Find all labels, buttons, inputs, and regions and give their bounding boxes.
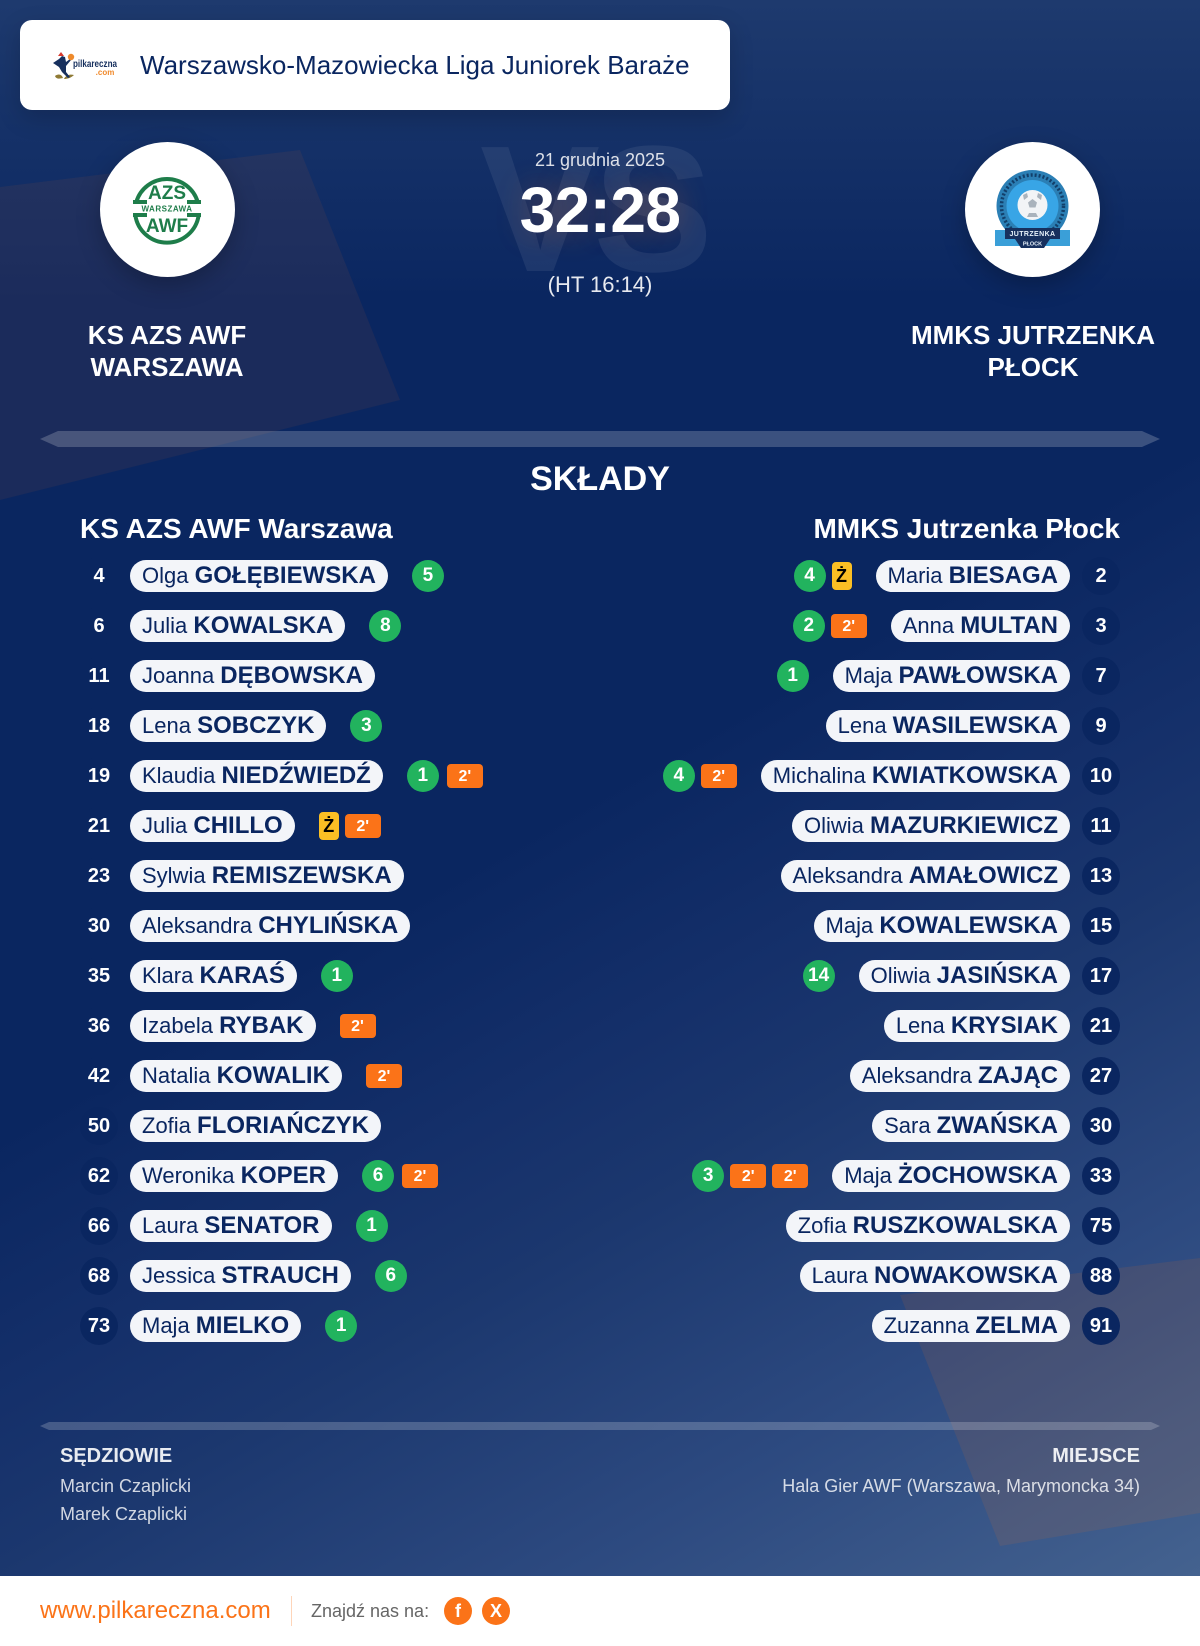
player: Rybak: 36	[88, 1015, 110, 1037]
player: Kowalik: Natalia KOWALIK	[142, 1062, 330, 1089]
player: Kowalska: 6	[93, 615, 105, 637]
player: Floriańczyk: 50	[88, 1115, 110, 1137]
player: Amałowicz	[781, 857, 1120, 895]
player: Karaś	[88, 960, 353, 992]
player: Multan	[793, 610, 1107, 642]
player: Wasilewska: Lena WASILEWSKA	[838, 712, 1058, 739]
player: Remiszewska: Sylwia REMISZEWSKA	[142, 862, 392, 889]
player: Mielko: 73	[88, 1315, 110, 1337]
player: Ruszkowalska: 75	[1090, 1215, 1112, 1237]
player: Nowakowska	[800, 1257, 1120, 1295]
referees heading: SĘDZIOWIE	[60, 1445, 172, 1467]
player: Sobczyk: 3	[361, 715, 372, 736]
player: Sobczyk	[88, 710, 382, 742]
player: Biesaga	[794, 560, 1107, 592]
player: Pawłowska: Maja PAWŁOWSKA	[845, 662, 1058, 689]
player: Kwiatkowska	[663, 757, 1120, 795]
player: Amałowicz: 13	[1090, 865, 1112, 887]
player: Kwiatkowska: 2'	[712, 768, 725, 785]
team name: left: WARSZAWA	[90, 352, 244, 382]
player: Gołębiewska: 4	[93, 565, 105, 587]
footer	[0, 1576, 1200, 1646]
player: Kowalska: Julia KOWALSKA	[142, 612, 333, 639]
player: Kowalska	[93, 610, 401, 642]
player: Krysiak	[884, 1007, 1120, 1045]
player: Strauch: Jessica STRAUCH	[142, 1262, 339, 1289]
player: Pawłowska: 7	[1095, 665, 1107, 687]
player: Biesaga: Ż	[836, 566, 847, 586]
right team roster	[663, 560, 1120, 1345]
player: Kowalik	[88, 1060, 402, 1092]
player: Żochowska: 3	[703, 1165, 714, 1186]
player: Biesaga: 2	[1095, 565, 1107, 587]
icon: pilkareczna logo: .com	[96, 68, 114, 77]
player: Amałowicz: Aleksandra AMAŁOWICZ	[793, 862, 1058, 889]
player: Dębowska: Joanna DĘBOWSKA	[142, 662, 363, 689]
VS watermark: VS	[480, 109, 706, 310]
team heading: left: KS AZS AWF Warszawa	[80, 513, 393, 544]
team heading: right: MMKS Jutrzenka Płock	[813, 513, 1120, 544]
icon: pilkareczna logo	[53, 52, 118, 79]
player: Jasińska: 14	[808, 965, 829, 986]
player: Karaś: 1	[332, 965, 342, 986]
player: Chylińska	[88, 910, 410, 942]
player: Rybak	[88, 1010, 376, 1042]
player: Floriańczyk	[88, 1110, 381, 1142]
team logo: Jutrzenka: PŁOCK	[1023, 242, 1042, 248]
player: Pawłowska	[777, 660, 1120, 694]
player: Dębowska	[88, 660, 375, 692]
player: Multan: Anna MULTAN	[903, 612, 1058, 639]
player: Sobczyk: 18	[88, 715, 110, 737]
player: Kowalik: 2'	[378, 1068, 390, 1085]
venue block	[782, 1445, 1140, 1496]
player: Gołębiewska: Olga GOŁĘBIEWSKA	[142, 562, 376, 589]
player: Chillo: Ż	[323, 816, 334, 836]
player: Senator: 1	[366, 1215, 377, 1236]
player: Kowalewska: 15	[1090, 915, 1112, 937]
venue name: Hala Gier AWF (Warszawa, Marymoncka 34)	[782, 1476, 1140, 1496]
player: Żochowska: Maja ŻOCHOWSKA	[844, 1162, 1058, 1189]
player: Jasińska	[803, 957, 1120, 995]
player: Chillo	[88, 810, 381, 842]
player: Zelma: 91	[1090, 1315, 1112, 1337]
divider arrow bar: top	[40, 431, 1160, 447]
player: Multan: 3	[1095, 615, 1107, 637]
player: Kwiatkowska: Michalina KWIATKOWSKA	[773, 762, 1058, 789]
player: Zelma: Zuzanna ZELMA	[884, 1312, 1058, 1339]
player: Mielko: 1	[336, 1315, 346, 1336]
player: Niedźwiedź	[88, 760, 483, 792]
player: Mielko	[80, 1307, 357, 1345]
player: Floriańczyk: Zofia FLORIAŃCZYK	[142, 1112, 369, 1139]
player: Koper: Weronika KOPER	[142, 1162, 326, 1189]
player: Ruszkowalska	[786, 1207, 1120, 1245]
league title text: Warszawsko-Mazowiecka Liga Juniorek Baraże	[140, 50, 690, 80]
player: Zając: 27	[1090, 1065, 1112, 1087]
player: Chylińska: 30	[88, 915, 110, 937]
player: Rybak: Izabela RYBAK	[142, 1012, 304, 1039]
player: Niedźwiedź: 19	[88, 765, 110, 787]
player: Remiszewska	[88, 860, 404, 892]
player: Kowalik: 42	[88, 1065, 110, 1087]
player: Kowalewska: Maja KOWALEWSKA	[826, 912, 1058, 939]
player: Karaś: 35	[88, 965, 110, 987]
player: Mazurkiewicz: 11	[1090, 815, 1112, 837]
player: Koper: 62	[88, 1165, 110, 1187]
player: Kwiatkowska: 4	[673, 765, 684, 786]
player: Gołębiewska: 5	[423, 565, 433, 586]
player: Multan: 2	[803, 615, 814, 636]
referee names	[60, 1476, 191, 1524]
player: Koper: 6	[373, 1165, 383, 1186]
player: Multan: 2'	[842, 618, 855, 635]
player: Krysiak: Lena KRYSIAK	[896, 1012, 1058, 1039]
player: Biesaga: Maria BIESAGA	[888, 562, 1058, 589]
player: Koper	[88, 1160, 438, 1192]
venue heading: MIEJSCE	[1052, 1445, 1140, 1467]
team logo: AZS AWF: AWF	[146, 216, 188, 237]
player: Zwańska	[872, 1107, 1120, 1145]
icon: facebook: f	[455, 1601, 461, 1621]
player: Mielko: Maja MIELKO	[142, 1312, 289, 1339]
left team roster	[80, 560, 483, 1345]
match date: 21 grudnia 2025	[535, 150, 665, 170]
final score: 32:28	[520, 174, 680, 246]
icon: X	[482, 1597, 510, 1625]
player: Niedźwiedź: Klaudia NIEDŹWIEDŹ	[142, 762, 371, 789]
team logo: Jutrzenka	[965, 142, 1100, 277]
team logo: AZS AWF	[100, 142, 235, 277]
player: Senator: 66	[88, 1215, 110, 1237]
player: Nowakowska: Laura NOWAKOWSKA	[812, 1262, 1058, 1289]
player: Żochowska: 2'	[742, 1168, 755, 1185]
player: Nowakowska: 88	[1090, 1265, 1112, 1287]
social label: Znajdź nas na:	[311, 1601, 429, 1621]
referee names: Marek Czaplicki	[60, 1504, 187, 1524]
player: Senator	[88, 1210, 388, 1242]
team logo: Jutrzenka: JUTRZENKA	[1010, 231, 1056, 238]
player: Krysiak: 21	[1090, 1015, 1112, 1037]
player: Ruszkowalska: Zofia RUSZKOWALSKA	[798, 1212, 1058, 1239]
player: Gołębiewska	[93, 560, 444, 592]
player: Zelma	[872, 1307, 1120, 1345]
player: Remiszewska: 23	[88, 865, 110, 887]
player: Żochowska: 2'	[784, 1168, 797, 1185]
player: Mazurkiewicz: Oliwia MAZURKIEWICZ	[804, 812, 1058, 839]
divider arrow bar: bottom	[40, 1422, 1160, 1430]
team logo: AZS AWF: WARSZAWA	[141, 204, 193, 214]
team name: right: MMKS JUTRZENKA	[911, 320, 1155, 350]
player: Wasilewska: 9	[1095, 715, 1107, 737]
player: Chillo: 2'	[356, 818, 369, 835]
referee names: Marcin Czaplicki	[60, 1476, 191, 1496]
team name: left	[88, 320, 246, 382]
player: Chillo: Julia CHILLO	[142, 812, 283, 839]
referees block	[60, 1445, 191, 1524]
section heading: squads: SKŁADY	[530, 460, 670, 498]
player: Kowalska: 8	[380, 615, 391, 636]
player: Zwańska: Sara ZWAŃSKA	[884, 1112, 1058, 1139]
player: Kwiatkowska: 10	[1090, 765, 1112, 787]
team name: right: PŁOCK	[988, 352, 1078, 382]
player: Karaś: Klara KARAŚ	[142, 962, 285, 989]
team name: left: KS AZS AWF	[88, 320, 246, 350]
player: Niedźwiedź: 1	[418, 765, 428, 786]
player: Żochowska	[692, 1157, 1120, 1195]
player: Zając: Aleksandra ZAJĄC	[862, 1062, 1058, 1089]
team name: right	[911, 320, 1155, 382]
player: Jasińska: 17	[1090, 965, 1112, 987]
icon: facebook	[444, 1597, 472, 1625]
player: Wasilewska	[826, 707, 1120, 745]
player: Strauch: 6	[386, 1265, 396, 1286]
player: Niedźwiedź: 2'	[458, 768, 471, 785]
player: Biesaga: 4	[804, 565, 815, 586]
player: Chylińska: Aleksandra CHYLIŃSKA	[142, 912, 398, 939]
player: Rybak: 2'	[351, 1018, 364, 1035]
player: Pawłowska: 1	[787, 665, 798, 686]
player: Sobczyk: Lena SOBCZYK	[142, 712, 314, 739]
player: Strauch: 68	[88, 1265, 110, 1287]
player: Kowalewska	[814, 907, 1120, 945]
player: Mazurkiewicz	[792, 807, 1120, 845]
player: Chillo: 21	[88, 815, 110, 837]
player: Jasińska: Oliwia JASIŃSKA	[871, 962, 1058, 989]
player: Żochowska: 33	[1090, 1165, 1112, 1187]
header card: league title	[20, 20, 730, 110]
player: Strauch	[80, 1257, 407, 1295]
player: Koper: 2'	[414, 1168, 426, 1185]
halftime score: (HT 16:14)	[548, 272, 652, 297]
player: Zwańska: 30	[1090, 1115, 1112, 1137]
website link: www.pilkareczna.com	[40, 1597, 271, 1624]
icon: X: X	[490, 1601, 502, 1621]
player: Senator: Laura SENATOR	[142, 1212, 320, 1239]
player: Dębowska: 11	[88, 665, 110, 687]
player: Zając	[850, 1057, 1120, 1095]
team logo: AZS AWF: AZS	[148, 183, 186, 204]
